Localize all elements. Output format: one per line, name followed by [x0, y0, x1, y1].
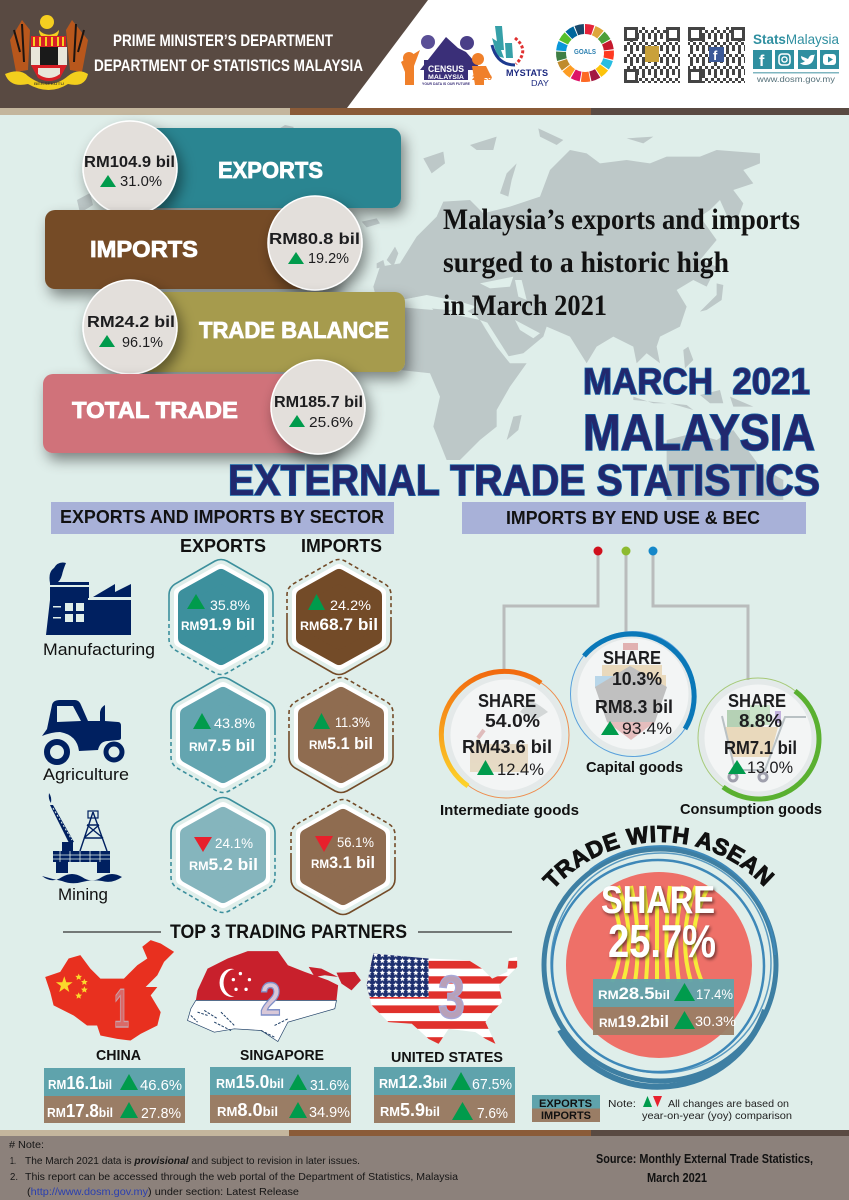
circle: capital goods: 10.3% [612, 669, 662, 689]
headline statement: surged to a historic high [443, 246, 729, 279]
map: united states [366, 954, 518, 1044]
panel: trade with asean [541, 825, 778, 1090]
circle: intermediate goods: SHARE [478, 691, 536, 711]
statsmalaysia social block [753, 31, 839, 84]
main title: MALAYSIA [583, 404, 815, 461]
panel: trade balance summary [83, 280, 405, 374]
table: singapore figures: RM15.0bil [216, 1072, 284, 1092]
logo: census 2020: YOUR DATA IS OUR FUTURE [422, 81, 470, 86]
source [596, 1151, 813, 1185]
connector lines and dots [504, 546, 748, 680]
note on year-on-year changes: year-on-year (yoy) comparison [642, 1110, 792, 1122]
logo: census 2020: CENSUS [428, 64, 464, 74]
statsmalaysia social block: StatsMalaysia [753, 31, 839, 47]
circle: capital goods: RM8.3 bil [595, 697, 673, 717]
table: china figures: RM16.1bil [48, 1073, 112, 1093]
hexagon: manufacturing exports [169, 560, 273, 674]
label: mining: Mining [58, 885, 108, 904]
table: singapore figures: 34.9% [309, 1105, 350, 1121]
header title: PRIME MINISTER’S DEPARTMENT [113, 31, 333, 50]
circle: consumption goods: 13.0% [747, 758, 793, 777]
table: china figures: RM17.8bil [47, 1101, 113, 1121]
footnotes: # Note: [9, 1140, 44, 1151]
column headings [180, 535, 382, 556]
label: consumption goods: Consumption goods [680, 801, 822, 818]
hexagon: agriculture exports [171, 678, 275, 792]
logo: census 2020 [401, 35, 492, 86]
main title [228, 361, 820, 505]
hexagon: agriculture imports: RM5.1 bil [309, 734, 373, 753]
hexagon: mining imports: RM3.1 bil [311, 853, 375, 872]
circle: intermediate goods: 12.4% [497, 760, 544, 779]
table: united states figures: RM5.9bil [380, 1100, 440, 1120]
panel: imports summary [45, 196, 362, 290]
icon: national emblem: BERSEKUTU [34, 81, 64, 86]
panel: imports summary: 19.2% [308, 251, 349, 267]
logo: mystats day: MYSTATS [506, 68, 548, 78]
label: capital goods: Capital goods [586, 759, 683, 776]
statsmalaysia social block: f [759, 53, 765, 70]
table: china figures: 27.8% [141, 1106, 181, 1122]
icon: oil rig [42, 793, 122, 883]
hexagon: mining imports [291, 800, 395, 914]
qr code one [624, 27, 680, 83]
hexagon: agriculture imports: 11.3% [335, 714, 370, 730]
sdg label: GOALS [574, 49, 596, 56]
label: agriculture: Agriculture [43, 765, 129, 784]
circle: intermediate goods: 54.0% [485, 711, 540, 731]
table: singapore figures: 31.6% [310, 1078, 349, 1094]
panel: exports summary: EXPORTS [218, 157, 323, 183]
headline statement [443, 203, 800, 322]
table: united states figures: 67.5% [472, 1077, 512, 1093]
curved heading: TRADE WITH ASEAN [541, 825, 776, 887]
note on year-on-year changes: Note: [608, 1098, 636, 1110]
header title: DEPARTMENT OF STATISTICS MALAYSIA [94, 56, 363, 75]
hexagon: mining imports: 56.1% [337, 834, 374, 850]
panel: imports summary: RM80.8 bil [269, 231, 360, 248]
table: united states figures [374, 1067, 515, 1123]
footnotes: 2. [10, 1172, 18, 1183]
statsmalaysia social block: www.dosm.gov.my [756, 74, 836, 84]
source: Source: Monthly External Trade Statistics, [596, 1151, 813, 1166]
icon: factory [46, 563, 132, 635]
panel: trade with asean: SHARE [601, 879, 715, 922]
circle: consumption goods: SHARE [728, 691, 786, 711]
footnotes: 1. [10, 1156, 16, 1167]
hexagon: manufacturing imports: 24.2% [330, 597, 371, 613]
hexagon: manufacturing imports: RM68.7 bil [300, 615, 378, 634]
circle: consumption goods: RM7.1 bil [724, 738, 797, 758]
circle: consumption goods: 8.8% [739, 711, 782, 731]
hexagon: manufacturing exports: RM91.9 bil [181, 615, 255, 634]
logo: mystats day [492, 26, 549, 88]
label: singapore: SINGAPORE [240, 1047, 324, 1064]
panel: exports summary: RM104.9 bil [84, 154, 175, 171]
world map background [77, 125, 783, 500]
heading: imports by end use and bec: IMPORTS BY END USE & BEC [506, 508, 760, 528]
heading: exports and imports by sector [51, 502, 394, 534]
qr code two: f [713, 48, 718, 63]
panel: total trade summary: 25.6% [309, 415, 353, 431]
panel: exports summary [83, 121, 401, 215]
panel: total trade summary: TOTAL TRADE [72, 397, 238, 423]
note on year-on-year changes [608, 1096, 792, 1122]
hexagon: agriculture exports: 43.8% [214, 715, 255, 731]
map: singapore [187, 951, 361, 1042]
footer stripes [0, 1130, 849, 1136]
heading: exports and imports by sector: EXPORTS AND IMPORTS BY SECTOR [60, 507, 384, 527]
logo: census 2020: MALAYSIA [428, 75, 465, 81]
footnotes: The March 2021 data is provisional and subject to revision in later issues. [25, 1156, 360, 1167]
table: united states figures: 7.6% [477, 1106, 508, 1122]
legend: IMPORTS [541, 1110, 591, 1122]
logo: census 2020: 2020 [472, 75, 492, 82]
circle: capital goods [570, 632, 696, 756]
circle: capital goods: SHARE [603, 648, 661, 668]
footer panel [0, 1136, 849, 1200]
footnotes: This report can be accessed through the web portal of the Department of Statistics, Malaysia [25, 1172, 458, 1183]
panel: trade with asean: RM28.5bil [598, 984, 670, 1003]
column headings: IMPORTS [301, 535, 382, 556]
label: united states: UNITED STATES [391, 1049, 503, 1066]
header stripes [0, 108, 849, 115]
map: china [45, 940, 174, 1041]
note on year-on-year changes: All changes are based on [668, 1098, 789, 1110]
circle: intermediate goods: RM43.6 bil [462, 737, 552, 757]
panel: trade with asean: 17.4% [696, 987, 733, 1002]
label: china: CHINA [96, 1047, 141, 1064]
hexagon: mining exports: 24.1% [215, 835, 253, 851]
map: united states: 3 [438, 964, 465, 1031]
panel: trade with asean: 30.3% [695, 1014, 736, 1029]
panel: exports summary: 31.0% [120, 174, 162, 190]
map: singapore: 2 [260, 973, 281, 1025]
panel: total trade summary: RM185.7 bil [274, 394, 363, 411]
label: intermediate goods: Intermediate goods [440, 802, 579, 819]
asean sheaf emblem [605, 886, 709, 982]
hexagon: manufacturing exports: 35.8% [210, 597, 250, 613]
hexagon: mining exports [171, 798, 275, 912]
headline statement: in March 2021 [443, 289, 607, 322]
source: March 2021 [647, 1170, 707, 1185]
heading: top 3 trading partners: TOP 3 TRADING PARTNERS [170, 921, 407, 943]
header band [0, 0, 849, 108]
panel: total trade summary [43, 360, 365, 454]
table: united states figures: RM12.3bil [379, 1072, 447, 1092]
table: china figures [44, 1068, 185, 1123]
header dark panel [0, 0, 428, 108]
icon: tractor [42, 700, 122, 762]
footnotes: (http://www.dosm.gov.my ) under section: Latest Release [27, 1187, 299, 1198]
panel: trade balance summary: 96.1% [122, 335, 163, 351]
hexagon: manufacturing imports [287, 560, 391, 674]
panel: trade with asean: RM19.2bil [599, 1012, 669, 1031]
table: singapore figures: RM8.0bil [217, 1100, 278, 1120]
panel: trade with asean: 25.7% [608, 915, 716, 967]
table: singapore figures [210, 1067, 351, 1123]
table: china figures: 46.6% [140, 1078, 182, 1094]
heading: imports by end use and bec [462, 502, 806, 534]
map: china: 1 [114, 977, 129, 1039]
circle: capital goods: 93.4% [622, 719, 672, 738]
legend: EXPORTS [539, 1098, 592, 1110]
legend [532, 1095, 600, 1122]
logo: sdg wheel [551, 19, 619, 87]
panel: imports summary: IMPORTS [90, 236, 198, 262]
hexagon: mining exports: RM5.2 bil [189, 855, 258, 874]
icon: national emblem [5, 15, 88, 90]
label: manufacturing: Manufacturing [43, 640, 155, 659]
headline statement: Malaysia’s exports and imports [443, 203, 800, 236]
main title: MARCH 2021 [583, 361, 810, 402]
panel: trade balance summary: TRADE BALANCE [199, 317, 389, 343]
column headings: EXPORTS [180, 535, 266, 556]
hexagon: agriculture imports [289, 678, 393, 792]
panel: trade balance summary: RM24.2 bil [87, 314, 175, 331]
qr code two [688, 27, 745, 83]
circle: intermediate goods [441, 671, 569, 798]
logo: mystats day: DAY [531, 78, 549, 88]
header title [94, 31, 363, 75]
hexagon: agriculture exports: RM7.5 bil [189, 736, 255, 755]
footnotes [9, 1140, 458, 1198]
circle: consumption goods [698, 678, 819, 799]
